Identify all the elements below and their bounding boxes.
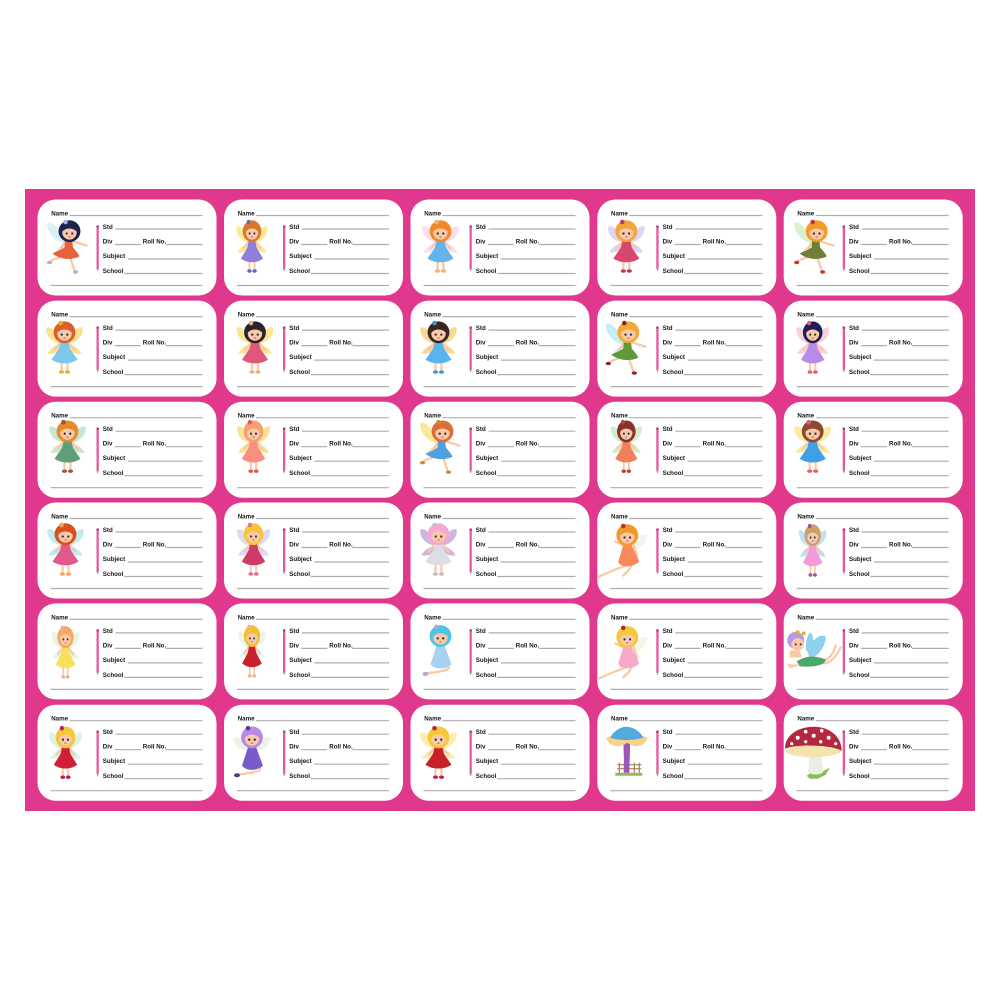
form labels: School [289, 571, 310, 578]
fairy: auburn hair, blue dress [420, 420, 460, 474]
form labels: Div [103, 441, 113, 448]
label r6c1 [38, 705, 216, 801]
label r5c1 [38, 603, 216, 699]
form labels: Roll No. [889, 238, 913, 246]
fairy: peach hair, yellow dress [52, 626, 79, 679]
form labels: Roll No. [329, 642, 353, 649]
form labels: School [289, 773, 310, 780]
label r4c1 [38, 502, 216, 598]
form labels: Subject [289, 657, 312, 664]
fairy: light brown hair, pink dress [799, 524, 826, 577]
form labels: Div [103, 642, 113, 649]
form labels: Div [663, 542, 673, 548]
form labels: Div [289, 238, 299, 246]
form labels: Subject [849, 253, 871, 260]
form labels: Name [797, 210, 815, 218]
form labels: School [849, 369, 870, 376]
label r5c4 [597, 603, 776, 699]
form labels: Roll No. [329, 744, 353, 751]
form labels: Div [476, 340, 486, 347]
fairy: blonde hair, red dress [49, 726, 82, 779]
label r4c2 [224, 502, 403, 598]
form labels [238, 413, 353, 477]
form labels [797, 514, 913, 578]
form labels: Name [611, 210, 628, 218]
form labels: Subject [849, 758, 871, 765]
label r2c1 [38, 301, 216, 397]
fairy: red hair, sky dress [46, 321, 83, 374]
fairy: orange hair, sage dress [49, 420, 86, 473]
form labels: Std [476, 628, 486, 635]
label r5c5 [784, 603, 963, 699]
form labels: Subject [289, 758, 312, 765]
form labels: Div [663, 238, 673, 246]
form labels: Roll No. [889, 642, 913, 649]
form labels: Std [849, 729, 859, 736]
form labels: Name [424, 413, 442, 420]
label r3c2 [224, 402, 403, 498]
form labels: School [103, 268, 124, 275]
form labels: Std [476, 426, 486, 433]
form labels: Roll No. [516, 340, 539, 347]
form labels: Std [289, 426, 299, 433]
form labels: Roll No. [143, 340, 166, 347]
label r6c3 [410, 705, 590, 801]
form labels: Div [289, 744, 299, 751]
label r5c3 [410, 603, 590, 699]
form labels: Div [849, 542, 859, 548]
label r2c5 [784, 301, 963, 397]
form labels: School [103, 369, 124, 376]
label r4c4 [597, 502, 776, 598]
form labels: Div [849, 642, 859, 649]
form labels: Subject [663, 253, 685, 260]
form labels: School [476, 268, 497, 275]
form labels [424, 514, 539, 578]
form labels: Std [476, 224, 486, 231]
form labels: School [103, 773, 124, 780]
form labels: Std [663, 729, 673, 736]
form labels: Subject [103, 455, 125, 462]
form labels: Name [238, 210, 255, 218]
form labels: School [849, 773, 870, 780]
form labels [238, 614, 353, 679]
form labels: Subject [663, 354, 685, 361]
form labels: Roll No. [143, 744, 166, 751]
form labels: Name [51, 614, 69, 621]
form labels: Name [611, 413, 628, 420]
form labels: Subject [103, 354, 125, 361]
form labels: Name [797, 614, 815, 621]
form labels: Subject [663, 556, 685, 563]
icon: blue mushroom with fence [606, 727, 647, 776]
form labels: Std [289, 729, 299, 736]
form labels: Name [238, 716, 255, 723]
label r4c3 [410, 502, 590, 598]
form labels: Roll No. [143, 441, 166, 448]
form labels: School [849, 672, 870, 679]
form labels: Roll No. [329, 542, 353, 548]
label r1c4 [597, 200, 776, 296]
form labels: School [289, 369, 310, 376]
form labels: Roll No. [143, 238, 166, 246]
form labels: Name [51, 514, 69, 520]
form labels [424, 210, 539, 275]
form labels: Roll No. [516, 238, 539, 246]
form labels: Subject [289, 556, 312, 563]
form labels: Std [476, 729, 486, 736]
form labels: Roll No. [703, 340, 726, 347]
form labels: School [476, 773, 497, 780]
form labels: School [849, 470, 870, 477]
fairy: orange hair, green skirt [794, 220, 834, 274]
label r6c4 [597, 705, 776, 801]
form labels: Roll No. [889, 441, 913, 448]
fairy: brown hair, blue dress [420, 321, 457, 374]
form labels: Div [476, 542, 486, 548]
form labels: School [103, 470, 124, 477]
label r3c3 [410, 402, 590, 498]
form labels: Roll No. [516, 642, 539, 649]
form labels [797, 614, 913, 679]
form labels [424, 312, 539, 376]
fairy: pink hair, white dress, purple wings [420, 523, 457, 576]
fairy: maroon hair, coral dress [611, 420, 642, 473]
form labels: School [663, 672, 684, 679]
fairy: black hair, pink dress [237, 321, 273, 374]
form labels: Name [51, 716, 69, 723]
form labels: School [476, 571, 497, 578]
form labels: Std [476, 325, 486, 332]
form labels: Name [424, 716, 442, 723]
form labels: Std [103, 729, 113, 736]
form labels: Std [289, 527, 299, 534]
form labels [238, 716, 353, 780]
form labels: School [663, 773, 684, 780]
form labels: Subject [849, 657, 871, 664]
fairy: seated, lilac hair, purple dress [234, 726, 270, 777]
fairy: blonde hair, red dress [238, 625, 266, 678]
form labels: Div [849, 238, 859, 246]
form labels [238, 210, 353, 275]
form labels: Roll No. [516, 744, 539, 751]
form labels: Roll No. [516, 441, 539, 448]
label r2c2 [224, 301, 403, 397]
label r4c5 [784, 502, 963, 598]
label r1c3 [410, 200, 590, 296]
form labels: School [103, 571, 124, 578]
form labels: Name [51, 413, 69, 420]
form labels: Div [476, 441, 486, 448]
form labels: Div [476, 238, 486, 246]
form labels [238, 514, 353, 578]
form labels: Div [849, 441, 859, 448]
form labels: Std [103, 325, 113, 332]
form labels: Roll No. [143, 542, 166, 548]
label r3c1 [38, 402, 216, 498]
form labels: Name [797, 312, 815, 319]
form labels: Std [103, 628, 113, 635]
form labels: Div [289, 340, 299, 347]
form labels: Subject [663, 758, 685, 765]
form labels: Roll No. [703, 238, 726, 246]
fairy: navy hair, lilac dress [796, 321, 829, 374]
form labels [51, 312, 166, 376]
form labels: Subject [849, 354, 871, 361]
form labels: School [476, 672, 497, 679]
form labels: Name [797, 716, 815, 723]
pink sheet background [25, 189, 975, 811]
form labels: Div [849, 744, 859, 751]
label r1c2 [224, 200, 403, 296]
form labels [611, 210, 726, 275]
form labels: Subject [476, 758, 498, 765]
form labels: Roll No. [329, 238, 353, 246]
form labels: Div [663, 340, 673, 347]
form labels: Div [663, 441, 673, 448]
form labels: School [849, 268, 870, 275]
form labels [611, 312, 726, 376]
fairy: blonde hair, red dress, yellow wings [420, 726, 457, 779]
form labels: School [663, 571, 684, 578]
form labels: Name [424, 514, 442, 520]
fairy: ginger hair, violet dress [236, 220, 268, 273]
fairy: lying down, lilac hair, green dress [787, 630, 841, 668]
fairy: chestnut hair, blue dress [794, 420, 831, 473]
fairy: orange hair, blue dress [422, 220, 459, 273]
form labels: Std [289, 325, 299, 332]
form labels: Div [476, 744, 486, 751]
form labels [611, 413, 726, 477]
form labels: Name [238, 413, 255, 420]
fairy: seated, aqua hair, pale blue dress [422, 625, 459, 676]
form labels: Std [103, 224, 113, 231]
form labels: Std [663, 325, 673, 332]
form labels: School [289, 672, 310, 679]
form labels: Subject [476, 253, 498, 260]
form labels: Div [289, 441, 299, 448]
form labels: Std [849, 426, 859, 433]
form labels: Div [289, 642, 299, 649]
form labels: Std [849, 325, 859, 332]
form labels: Roll No. [889, 340, 913, 347]
fairy: seated, orange dress [599, 524, 647, 576]
form labels [51, 413, 166, 477]
form labels: Name [611, 514, 628, 520]
label r6c5 [784, 705, 963, 801]
form labels: Std [663, 527, 673, 534]
form labels [611, 716, 726, 780]
form labels: Name [611, 716, 628, 723]
form labels: Name [238, 614, 255, 621]
form labels: Subject [663, 657, 685, 664]
fairy: navy hair, orange dress [47, 220, 86, 274]
form labels: Div [849, 340, 859, 347]
form labels: School [663, 470, 684, 477]
form labels: Name [797, 514, 815, 520]
form labels: Std [849, 527, 859, 534]
form labels: Std [663, 224, 673, 231]
label r1c5 [784, 200, 963, 296]
form labels: School [289, 268, 310, 275]
form labels: Roll No. [703, 642, 726, 649]
label r2c3 [410, 301, 590, 397]
form labels: Std [289, 628, 299, 635]
form labels: Std [849, 224, 859, 231]
form labels [238, 312, 353, 376]
label r3c5 [784, 402, 963, 498]
label r6c2 [224, 705, 403, 801]
form labels: Div [663, 744, 673, 751]
form labels: Roll No. [889, 744, 913, 751]
form labels: Std [663, 628, 673, 635]
form labels: Div [103, 744, 113, 751]
fairy: red hair, magenta dress [47, 523, 84, 576]
fairy: peach hair, coral dress [237, 420, 270, 473]
form labels [51, 514, 166, 578]
form labels [797, 210, 913, 275]
form labels: Div [103, 238, 113, 246]
form labels: Name [424, 614, 442, 621]
form labels [797, 716, 913, 780]
form labels: Name [424, 210, 442, 218]
form labels [424, 716, 539, 780]
form labels: Subject [476, 657, 498, 664]
form labels: Std [289, 224, 299, 231]
form labels: School [663, 268, 684, 275]
form labels: Div [663, 642, 673, 649]
label r5c2 [224, 603, 403, 699]
form labels: Roll No. [329, 441, 353, 448]
form labels [51, 210, 166, 275]
form labels: Std [663, 426, 673, 433]
form labels: Subject [289, 455, 312, 462]
form labels: Name [238, 312, 255, 319]
form labels: Roll No. [703, 542, 726, 548]
form labels: Name [51, 210, 69, 218]
form labels: Subject [289, 354, 312, 361]
form labels: Roll No. [889, 542, 913, 548]
form labels: Div [103, 340, 113, 347]
form labels: Subject [476, 455, 498, 462]
form labels: School [103, 672, 124, 679]
form labels: Std [849, 628, 859, 635]
form labels: Std [103, 527, 113, 534]
form labels [797, 312, 913, 376]
form labels: Name [424, 312, 442, 319]
form labels [424, 614, 539, 679]
form labels: Subject [103, 253, 125, 260]
form labels: Roll No. [143, 642, 166, 649]
form labels: Name [611, 614, 628, 621]
form labels: Subject [476, 556, 498, 563]
form labels [51, 716, 166, 780]
form labels: School [849, 571, 870, 578]
form labels: Name [797, 413, 815, 420]
fairy: blonde hair, green dress [606, 321, 645, 375]
form labels [611, 614, 726, 679]
form labels [797, 413, 913, 477]
form labels: Div [476, 642, 486, 649]
form labels: Subject [103, 556, 125, 563]
form labels: Roll No. [516, 542, 539, 548]
form labels: Subject [476, 354, 498, 361]
form labels: Subject [103, 758, 125, 765]
fairy: seated, pink dress [599, 626, 647, 678]
form labels: School [289, 470, 310, 477]
form labels: Subject [663, 455, 685, 462]
form labels: Subject [849, 455, 871, 462]
icon: red spotted mushroom [785, 727, 842, 779]
fairy: blonde hair, rose dress [608, 220, 645, 273]
form labels: Subject [289, 253, 312, 260]
form labels [611, 514, 726, 578]
form labels: School [663, 369, 684, 376]
form labels: Roll No. [329, 340, 353, 347]
form labels: Std [103, 426, 113, 433]
label r2c4 [597, 301, 776, 397]
form labels: Div [103, 542, 113, 548]
form labels: Name [238, 514, 255, 520]
form labels [51, 614, 166, 679]
form labels: Name [611, 312, 628, 319]
label r1c1 [38, 200, 216, 296]
label r3c4 [597, 402, 776, 498]
fairy: blonde hair, crimson dress [237, 523, 270, 576]
form labels: Name [51, 312, 69, 319]
form labels: Div [289, 542, 299, 548]
form labels: School [476, 470, 497, 477]
form labels: School [476, 369, 497, 376]
form labels [424, 413, 539, 477]
form labels: Subject [103, 657, 125, 664]
form labels: Roll No. [703, 744, 726, 751]
form labels: Std [476, 527, 486, 534]
form labels: Subject [849, 556, 871, 563]
form labels: Roll No. [703, 441, 726, 448]
